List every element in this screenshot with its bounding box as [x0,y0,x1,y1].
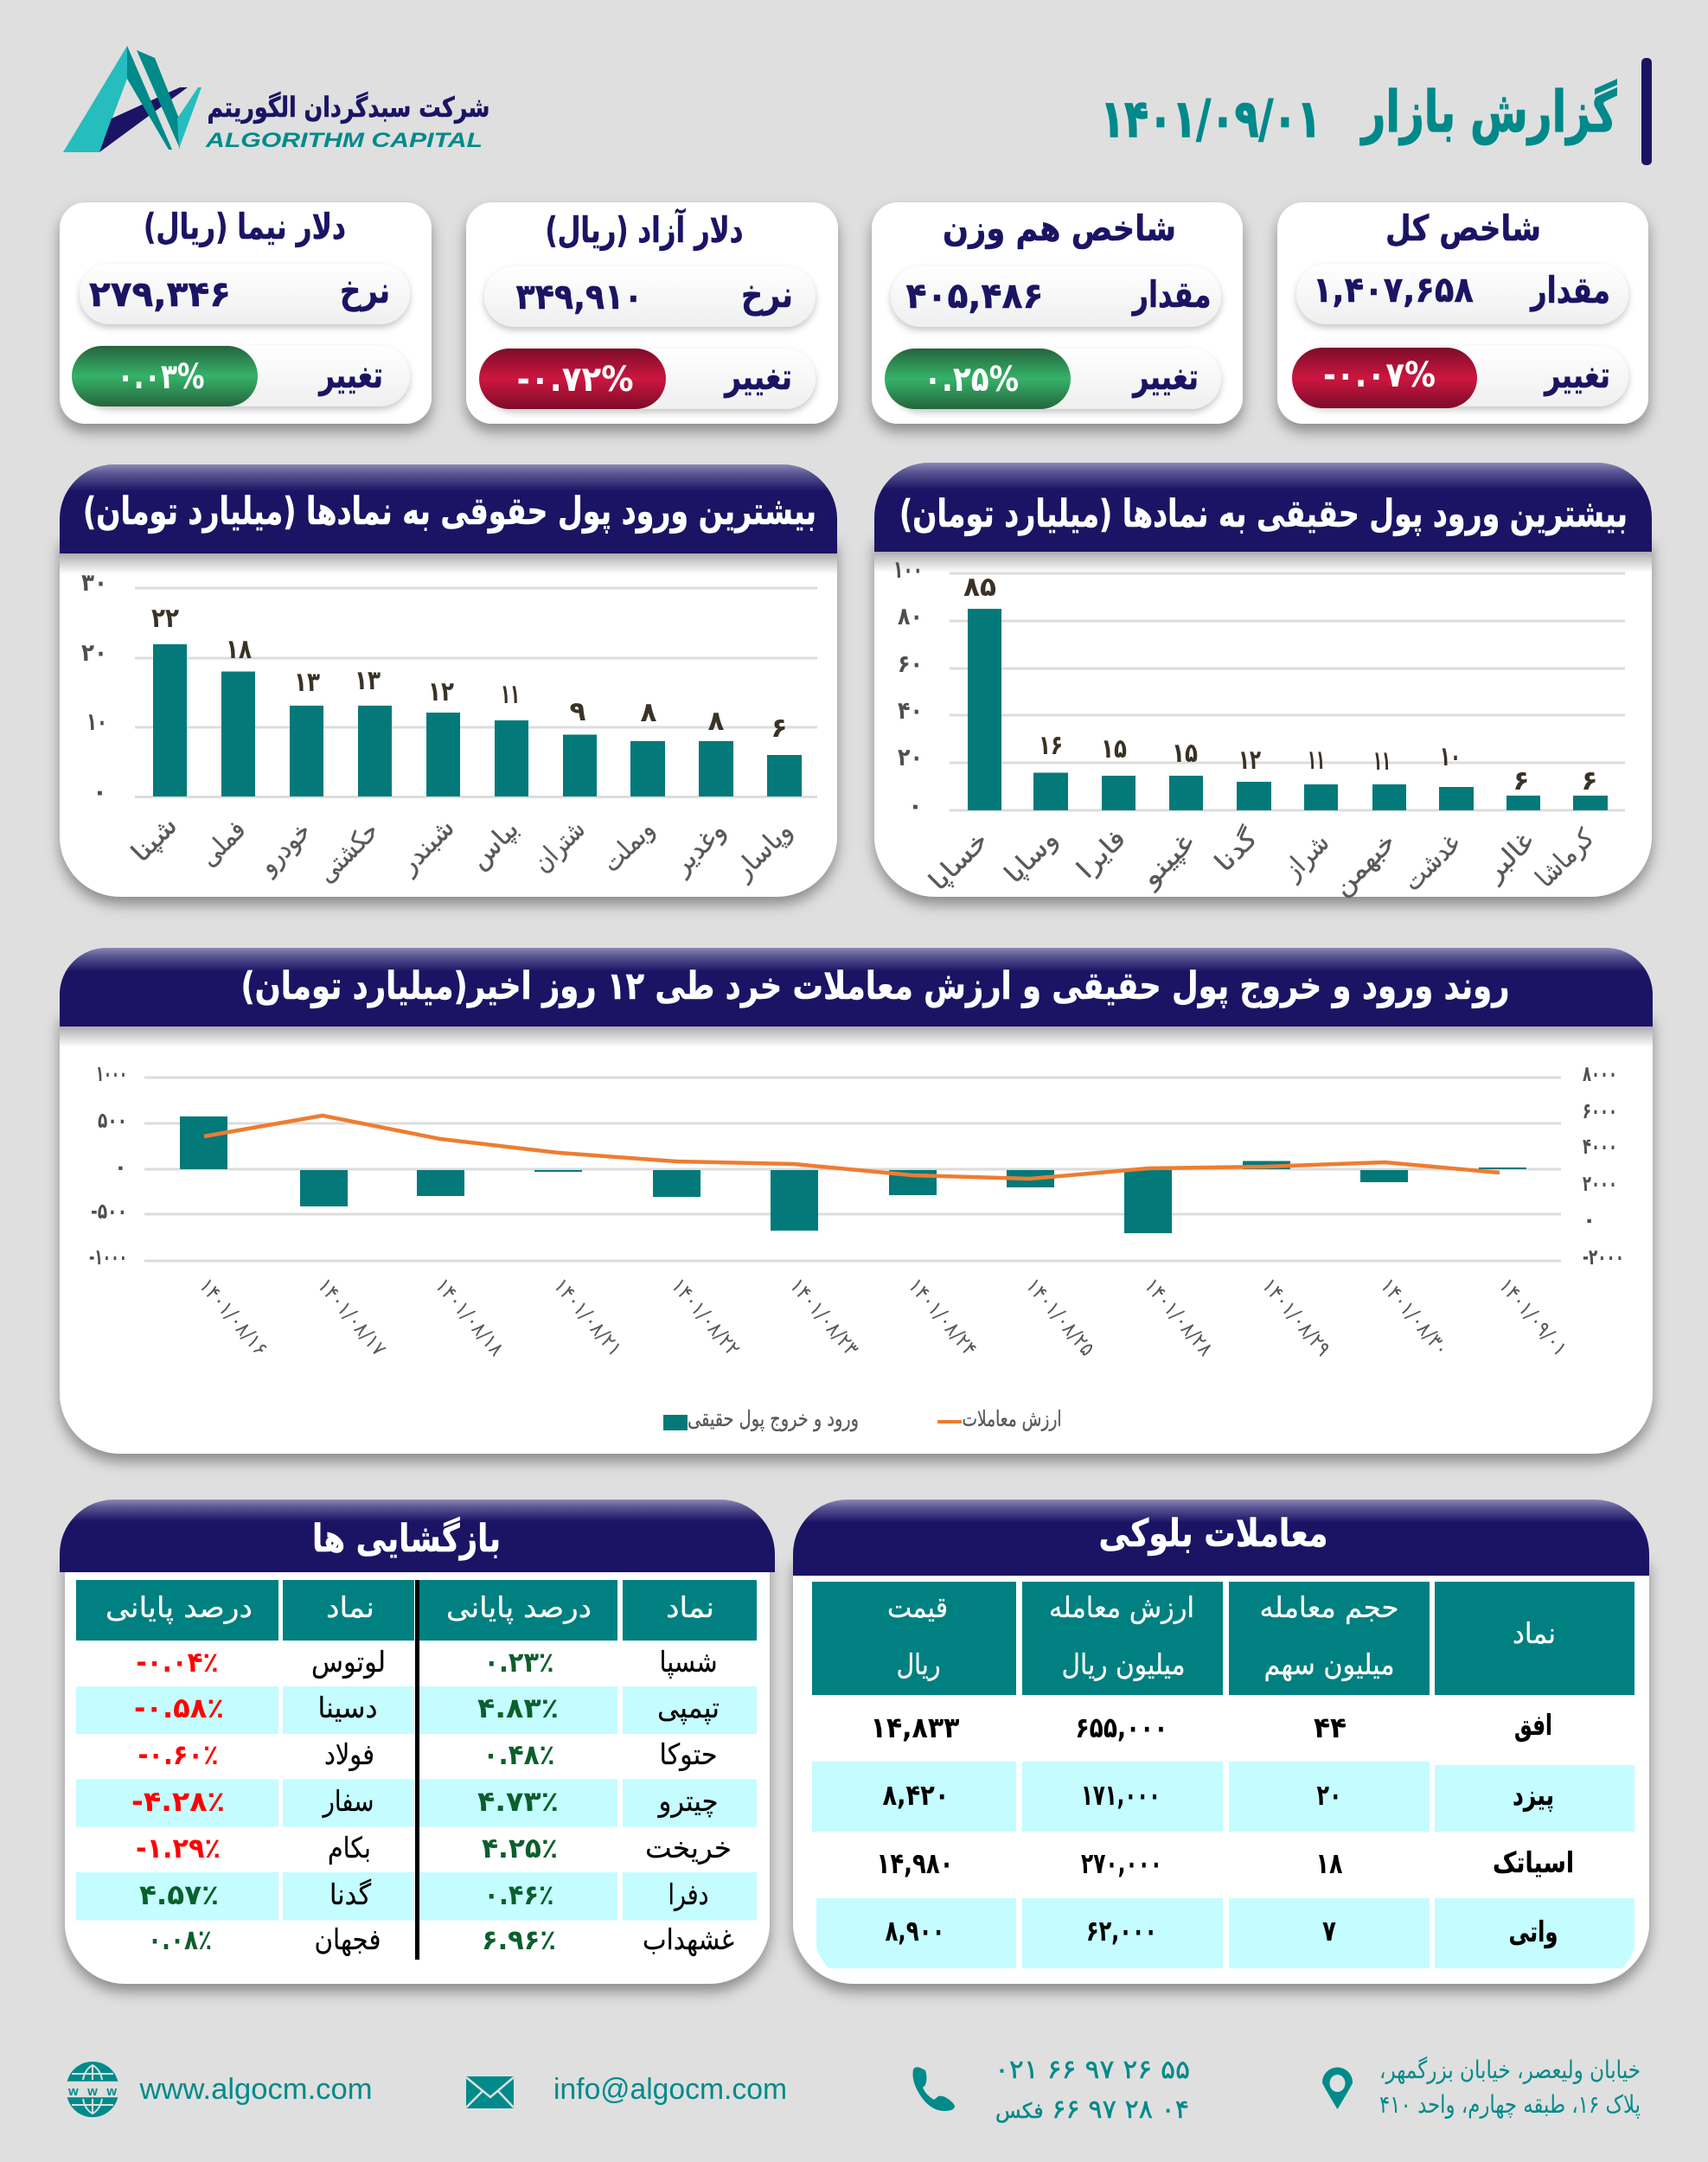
table: block trades: ریال [896,1647,941,1681]
panel: real money inflow [874,463,1652,902]
table: block trades: ۶۲,۰۰۰ [1086,1914,1157,1948]
bar chart: real inflow: ۶ [1582,765,1597,796]
table: block trades: ۲۰ [1316,1778,1342,1812]
combo chart: flow bars and trade value line [89,1061,1624,1360]
combo chart: flow bars and trade value line: ۱۴۰۱/۰۸/۱۶ [195,1274,272,1360]
table: openings: دفرا [668,1877,709,1911]
card: equal weight index: مقدار [1131,273,1211,316]
table: block trades: حجم معامله [1259,1590,1399,1624]
card: total index: ۱,۴۰۷,۶۵۸ [1313,269,1474,310]
card: dollar nima: ۰.۰۳% [118,357,204,397]
combo chart: flow bars and trade value line: ۱۴۰۱/۰۸/۲۳ [785,1274,863,1360]
chart legend: ورود و خروج پول حقیقی [688,1406,859,1432]
table: openings: حتوکا [659,1737,718,1771]
bar chart: legal inflow: ۹ [570,696,586,727]
card: total index: تغییر [1543,354,1610,397]
bar chart: real inflow: ۱۰۰ [893,555,923,584]
combo chart: flow bars and trade value line: -۲۰۰۰ [1583,1244,1624,1270]
card: dollar nima [60,202,432,424]
bar chart: legal inflow: وبملت [597,815,661,879]
card: total index [1277,202,1648,424]
header accent bar [1641,58,1652,165]
table: openings: درصد پایانی [446,1590,592,1624]
bar chart: legal inflow: ۱۳ [355,665,381,696]
card: dollar free: -۰.۷۲% [517,360,633,400]
table: block trades: نماد [1513,1616,1556,1650]
logo: Algorithm Capital [63,46,489,152]
bar chart: legal inflow: خودرو [252,816,317,881]
table: openings: ۴.۲۵٪ [482,1832,558,1865]
heading: معاملات بلوکی [1098,1512,1328,1556]
bar chart: real inflow: ۱۲ [1238,745,1261,776]
combo chart: flow bars and trade value line: ۱۴۰۱/۰۸/۲۱ [549,1274,627,1360]
bar chart: real inflow: ۱۵ [1172,738,1198,769]
bar chart: real inflow: ۲۰ [898,743,923,771]
table: openings: سفار [322,1784,374,1818]
bar chart: legal inflow [81,568,817,889]
card: dollar nima: تغییر [318,354,383,397]
footer: phone and fax: ۰۴ ۲۸ ۹۷ ۶۶ فکس [995,2095,1189,2125]
bar chart: legal inflow: ۱۸ [226,634,252,665]
table: openings: ۶.۹۶٪ [482,1923,556,1956]
heading: بازگشایی ها [312,1516,501,1561]
bar chart: real inflow: ۸۰ [898,602,923,630]
table: block trades: قیمت [887,1590,948,1624]
footer: address [1322,2056,1641,2119]
panel: block trades table [793,1500,1649,1984]
combo chart: flow bars and trade value line: -۵۰۰ [91,1199,127,1224]
bar chart: legal inflow: ۶ [771,713,787,744]
table: openings: -۱.۲۹٪ [136,1832,221,1865]
bar chart: real inflow: فایرا [1071,823,1132,885]
panel: market openings table [60,1500,775,1984]
combo chart: flow bars and trade value line: ۱۴۰۱/۰۸/۱۸ [431,1274,509,1360]
table: block trades: پیزد [1513,1778,1554,1813]
footer: address: پلاک ۱۶، طبقه چهارم، واحد ۴۱۰ [1379,2090,1641,2119]
table: block trades: واتی [1508,1915,1558,1949]
bar chart: real inflow: کرماشا [1530,823,1601,893]
card: dollar nima: نرخ [340,269,390,312]
card: equal weight index [872,202,1243,424]
table: openings: درصد پایانی [106,1590,253,1624]
bar chart: legal inflow: ۲۰ [81,638,107,667]
heading: روند ورود و خروج پول حقیقی و ارزش معاملات خرد طی ۱۲ روز اخیر(میلیارد تومان) [240,964,1510,1008]
table: openings: -۰.۵۸٪ [134,1692,224,1724]
table: block trades: اسیاتک [1493,1845,1574,1879]
combo chart: flow bars and trade value line: ۰ [1583,1207,1596,1232]
card: equal weight index: ۰.۲۵% [924,360,1019,400]
footer: phone and fax [912,2055,1190,2125]
bar chart: real inflow: غدشت [1398,828,1467,898]
footer: website [67,2063,372,2115]
card: dollar free [466,202,838,424]
bar chart: legal inflow: ۸ [708,706,725,737]
table: openings: لوتوس [311,1645,386,1679]
table: openings: شسپا [659,1645,718,1679]
title: گزارش بازار [1359,79,1617,145]
table: block trades: ۸,۹۰۰ [886,1914,944,1948]
logo: Algorithm Capital: ALGORITHM CAPITAL [205,129,483,152]
table: openings: ۰.۴۶٪ [484,1878,553,1911]
table: block trades: ۴۴ [1314,1711,1347,1744]
bar chart: legal inflow: ۱۰ [86,707,107,736]
card: dollar nima: ۲۷۹,۳۴۶ [89,273,231,315]
footer: website: www.algocm.com [138,2073,373,2106]
card: equal weight index: شاخص هم وزن [943,208,1176,250]
bar chart: legal inflow: ۱۳ [294,667,320,698]
card: dollar free: نرخ [741,273,793,317]
combo chart: flow bars and trade value line: ۴۰۰۰ [1583,1134,1617,1159]
card: dollar free: دلار آزاد (ریال) [545,208,744,251]
bar chart: real inflow: ۱۱ [1373,745,1391,777]
combo chart: flow bars and trade value line: ۸۰۰۰ [1583,1061,1617,1086]
table: block trades: ۱۷۱,۰۰۰ [1081,1778,1161,1812]
card: total index: مقدار [1529,269,1610,311]
table: openings: -۰.۶۰٪ [138,1738,218,1771]
bar chart: legal inflow: فملی [194,815,252,873]
panel: legal money inflow [60,464,837,897]
bar chart: legal inflow: ۱۲ [428,676,454,707]
card: dollar free: تغییر [723,355,792,399]
bar chart: real inflow: وساپا [999,824,1064,889]
bar chart: real inflow: ۴۰ [898,696,923,725]
card: total index: شاخص کل [1385,208,1541,249]
combo chart: flow bars and trade value line: ۱۴۰۱/۰۹/۰۱ [1494,1274,1572,1360]
bar chart: real inflow: ۶ [1513,765,1529,796]
footer: phone and fax: ۰۲۱ ۶۶ ۹۷ ۲۶ ۵۵ [995,2055,1190,2085]
combo chart: flow bars and trade value line: ۶۰۰۰ [1583,1098,1617,1123]
bar chart: real inflow: ۰ [908,791,923,820]
bar chart: real inflow: ۱۶ [1039,730,1063,761]
table: openings: ۴.۵۷٪ [139,1878,219,1911]
bar chart: legal inflow: وغدیر [665,816,732,882]
card: equal weight index: تغییر [1131,355,1199,399]
bar chart: legal inflow: ۱۱ [501,679,520,710]
combo chart: flow bars and trade value line: ۱۴۰۱/۰۸/۲۴ [904,1274,982,1360]
table: openings: خریخت [645,1831,732,1865]
table: openings: فجهان [315,1922,381,1956]
card: equal weight index: ۴۰۵,۴۸۶ [906,275,1043,317]
bar chart: legal inflow: شتران [528,815,592,879]
footer: website: www [67,2084,117,2099]
table: openings: گدنا [329,1877,371,1911]
panel: 12-day trend [60,948,1653,1454]
bar chart: real inflow: غپینو [1134,828,1200,894]
table: openings: تپمپی [657,1691,720,1724]
card: dollar free: ۳۴۹,۹۱۰ [515,276,643,317]
table: block trades: ۱۸ [1316,1846,1342,1880]
table: openings: -۰.۰۴٪ [137,1646,218,1679]
combo chart: flow bars and trade value line: -۱۰۰۰ [89,1244,127,1270]
report date: ۱۴۰۱/۰۹/۰۱ [1100,89,1321,150]
chart legend [663,1406,1062,1432]
table: openings: ۰.۴۸٪ [483,1738,555,1771]
table: block trades: ۱۴,۹۸۰ [877,1846,953,1880]
bar chart: legal inflow: ۲۲ [151,603,179,634]
bar chart: real inflow: خبهمن [1327,827,1402,902]
table: openings: ۴.۷۳٪ [477,1785,559,1818]
table: block trades [812,1582,1634,1968]
bar chart: real inflow: گدنا [1209,822,1264,878]
table: openings: نماد [326,1590,374,1624]
table: block trades: افق [1514,1708,1552,1743]
bar chart: legal inflow: بپاس [464,814,525,875]
bar chart: legal inflow: ۰ [93,777,107,806]
table: openings: چیترو [657,1784,718,1818]
bar chart: legal inflow: شپنا [125,810,183,868]
table: block trades: میلیون ریال [1062,1647,1185,1681]
table: openings: بکام [328,1831,371,1865]
table: openings: ۰.۲۳٪ [484,1646,553,1679]
combo chart: flow bars and trade value line: ۵۰۰ [98,1108,127,1133]
table: block trades: ۸,۴۲۰ [882,1778,950,1812]
combo chart: flow bars and trade value line: ۱۴۰۱/۰۸/۲۹ [1257,1274,1335,1360]
bar chart: legal inflow: حکشتی [311,816,385,889]
bar chart: real inflow: ۱۵ [1101,733,1127,764]
bar chart: real inflow: غالبر [1478,826,1540,889]
bar chart: real inflow: ۱۱ [1308,745,1325,776]
bar chart: real inflow: ۸۵ [963,572,996,603]
bar chart: real inflow: شراز [1276,828,1335,887]
table: block trades: ۱۴,۸۳۳ [870,1711,960,1744]
bar chart: legal inflow: ۸ [641,697,657,728]
combo chart: flow bars and trade value line: ۱۴۰۱/۰۸/۲۲ [667,1274,745,1360]
card: dollar nima: دلار نیما (ریال) [144,206,346,247]
bar chart: legal inflow: وپاسار [727,816,798,887]
footer: email [466,2073,787,2108]
table: block trades: ۷ [1322,1914,1336,1948]
bar chart: real inflow: خساپا [923,825,995,897]
combo chart: flow bars and trade value line: ۱۴۰۱/۰۸/۳۰ [1376,1274,1454,1360]
table: openings: ۰.۰۸٪ [148,1923,212,1956]
table: openings [76,1580,757,1960]
footer: address: خیابان ولیعصر، خیابان بزرگمهر، [1379,2056,1641,2084]
combo chart: flow bars and trade value line: ۱۰۰۰ [96,1061,127,1086]
table: openings: نماد [666,1590,714,1624]
combo chart: flow bars and trade value line: ۱۴۰۱/۰۸/۲۸ [1140,1274,1218,1360]
table: block trades: ۲۷۰,۰۰۰ [1081,1846,1162,1880]
bar chart: legal inflow: ۳۰ [81,568,107,597]
bar chart: real inflow [893,555,1625,902]
table: block trades: ارزش معامله [1049,1590,1194,1624]
table: openings: فولاد [324,1737,374,1771]
footer: email: info@algocm.com [553,2073,787,2106]
bar chart: legal inflow: شبندر [392,813,461,881]
combo chart: flow bars and trade value line: ۱۴۰۱/۰۸/۲۵ [1021,1274,1099,1360]
table: openings: -۴.۲۸٪ [131,1785,225,1818]
table: openings: دسینا [318,1691,377,1724]
table: block trades: میلیون سهم [1264,1647,1394,1681]
bar chart: real inflow: ۱۰ [1440,741,1461,772]
card: total index: -۰.۰۷% [1323,355,1436,395]
logo: Algorithm Capital: شرکت سبدگردان الگوریتم [208,91,489,124]
combo chart: flow bars and trade value line: ۲۰۰۰ [1583,1171,1617,1196]
combo chart: flow bars and trade value line: ۰ [114,1155,127,1180]
table: block trades: ۶۵۵,۰۰۰ [1076,1711,1167,1744]
bar chart: real inflow: ۶۰ [898,649,923,678]
chart legend: ارزش معاملات [962,1406,1062,1431]
table: openings: ۴.۸۳٪ [477,1692,559,1724]
combo chart: flow bars and trade value line: ۱۴۰۱/۰۸/۱۷ [313,1274,391,1360]
table: openings: غشهداب [643,1922,734,1956]
heading: بیشترین ورود پول حقوقی به نمادها (میلیارد تومان) [83,489,816,534]
